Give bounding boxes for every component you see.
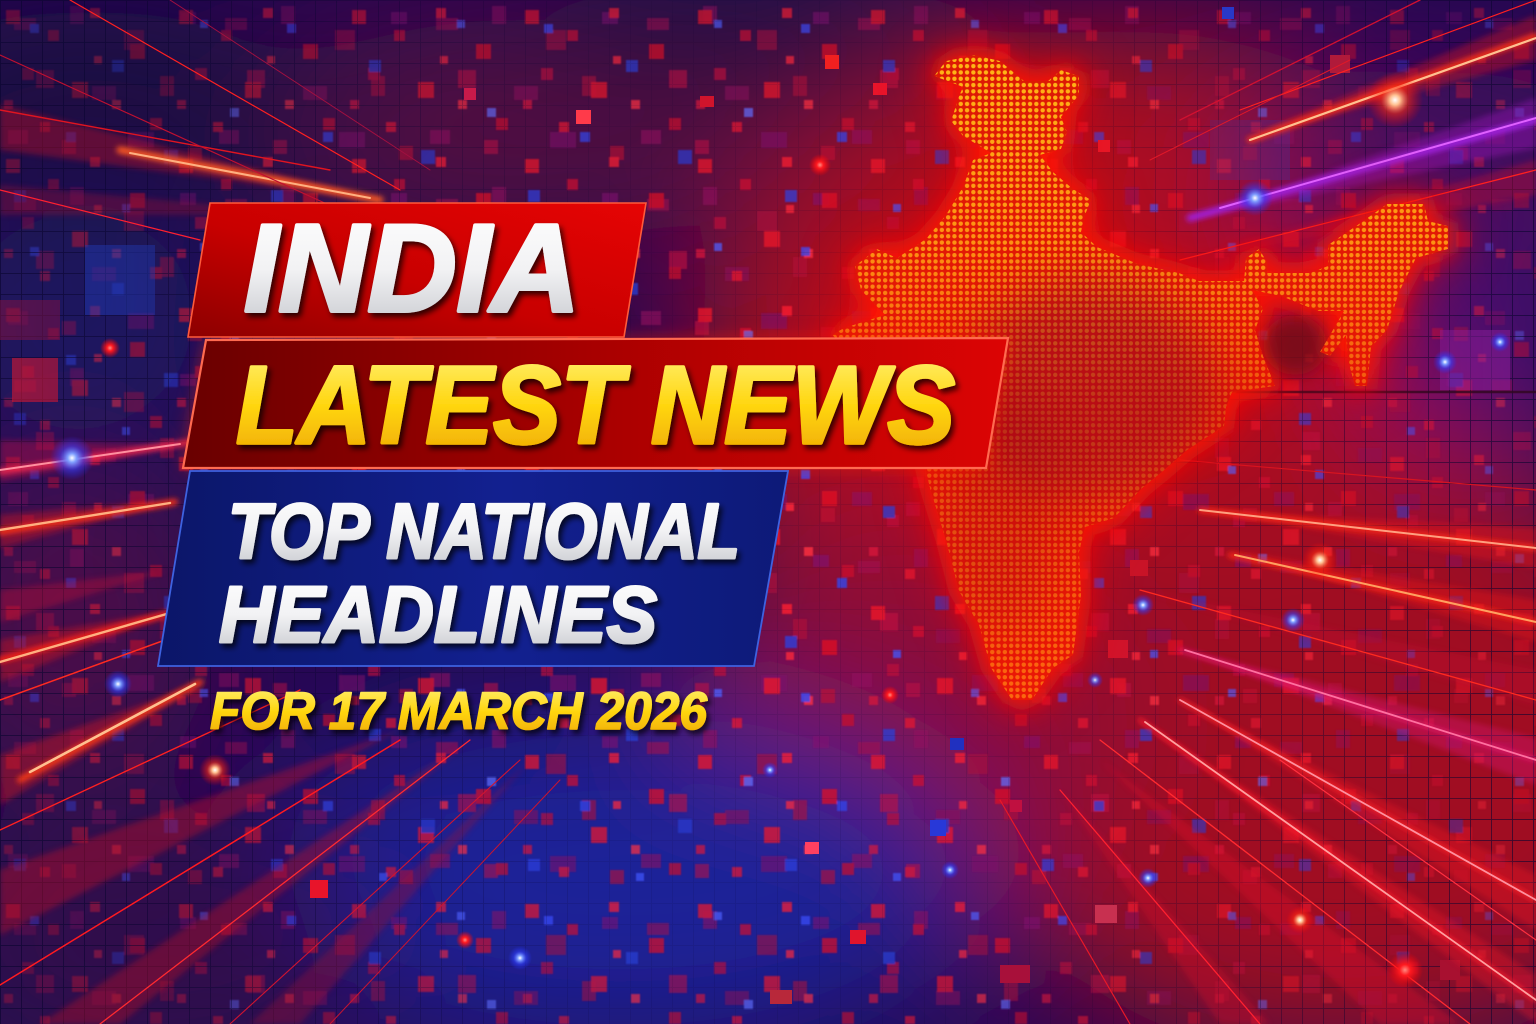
date line: FOR 17 MARCH 2026 <box>210 682 707 741</box>
india map <box>832 55 1448 700</box>
panel: latest news <box>183 338 1008 468</box>
panel: top national headlines <box>158 471 788 666</box>
panel: India <box>188 200 646 338</box>
map dotted fill <box>832 55 1448 700</box>
subtitle line one: TOP NATIONAL <box>228 487 740 575</box>
title: latest news: LATEST NEWS <box>236 344 955 467</box>
background: accent squares <box>310 7 1460 1004</box>
bay of bengal shadow <box>1263 315 1327 375</box>
map tight glow <box>832 55 1448 700</box>
map outer glow <box>832 55 1448 700</box>
title: India: INDIA <box>244 200 580 338</box>
subtitle line two: HEADLINES <box>219 570 657 659</box>
panel glow: behind latest news banner <box>183 338 1008 468</box>
